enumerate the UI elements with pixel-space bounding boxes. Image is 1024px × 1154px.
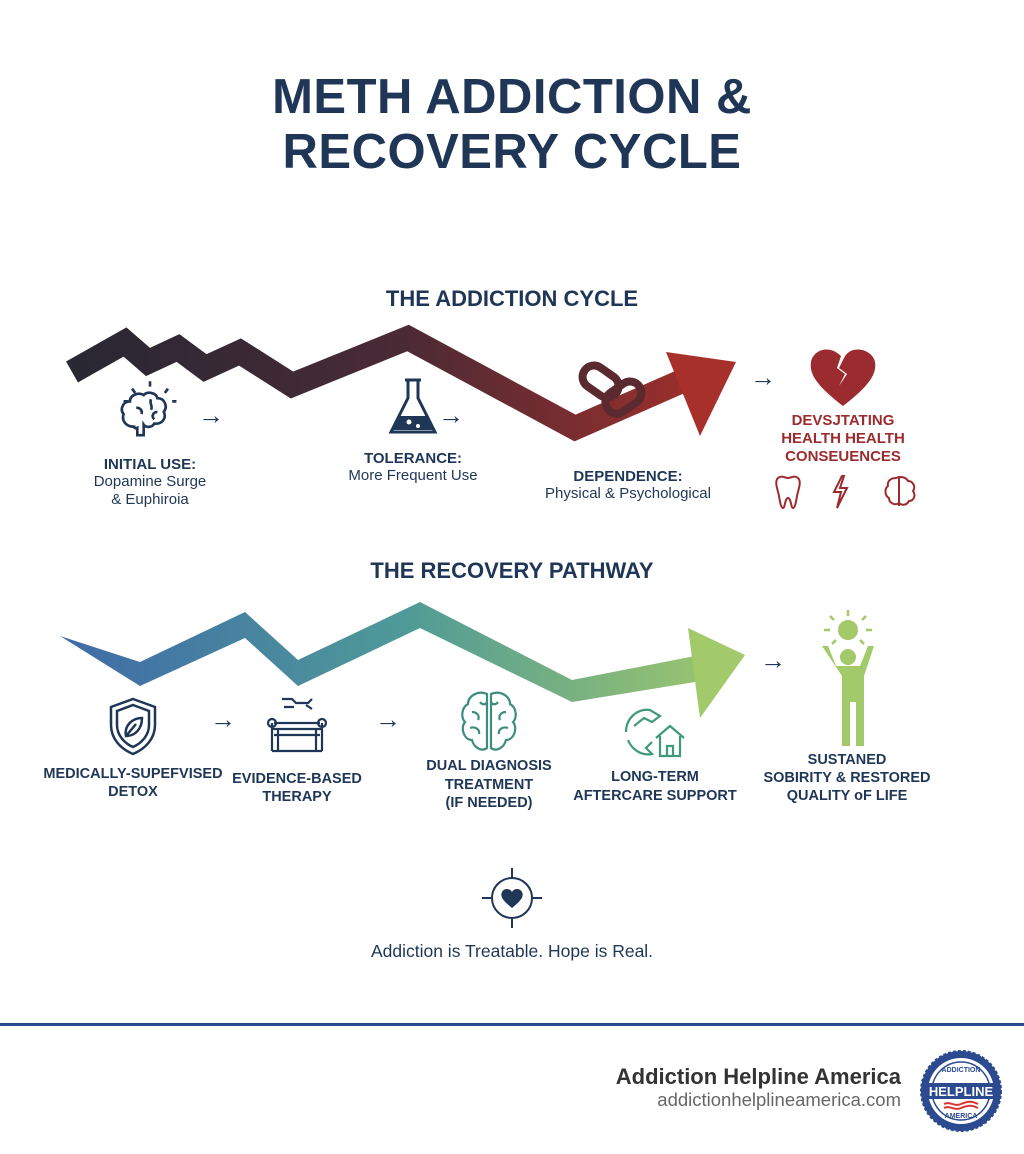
- heading: addiction cycle: THE ADDICTION CYCLE: [386, 286, 638, 311]
- icon: broken heart: [810, 350, 876, 406]
- step: dual diagnosis: (IF NEEDED): [446, 795, 532, 811]
- step: therapy: THERAPY: [262, 789, 332, 805]
- icon: brain teal: [461, 692, 517, 751]
- icon: flask: [388, 378, 438, 434]
- step: dual diagnosis: [426, 692, 552, 811]
- icon: shield: [110, 698, 156, 756]
- icon: chain: [578, 362, 646, 418]
- addiction arrow: [72, 338, 736, 436]
- final outcome: sustained sobriety: SOBIRITY & RESTORED: [763, 770, 931, 786]
- title: [272, 70, 752, 179]
- step: aftercare: AFTERCARE SUPPORT: [573, 788, 737, 804]
- icon: hands and house: [624, 708, 685, 758]
- final outcome: sustained sobriety: SUSTANED: [808, 752, 886, 768]
- icon: crosshair heart: [482, 868, 542, 928]
- step: aftercare: LONG-TERM: [611, 769, 699, 785]
- step: detox: [43, 698, 223, 800]
- arrow: →: [760, 645, 786, 675]
- arrow: →: [438, 400, 464, 430]
- step: initial use: Dopamine Surge: [94, 473, 206, 490]
- footer brand text: addictionhelplineamerica.com: [657, 1089, 901, 1110]
- title: METH ADDICTION &: [272, 70, 752, 124]
- consequences block: DEVSJTATING: [792, 412, 894, 429]
- title: RECOVERY CYCLE: [282, 125, 741, 179]
- step: dual diagnosis: TREATMENT: [445, 776, 533, 792]
- step: detox: MEDICALLY-SUPEFVISED: [43, 766, 223, 782]
- consequences block: [775, 350, 916, 509]
- arrow: →: [375, 704, 401, 734]
- logo badge: [920, 1050, 1002, 1132]
- icon: person with sun: [822, 610, 874, 746]
- icon: brain: [120, 381, 176, 436]
- step: detox: DETOX: [108, 784, 158, 800]
- icon: couch: [266, 698, 328, 752]
- logo badge: AMERICA: [945, 1113, 977, 1120]
- step: therapy: [232, 698, 362, 805]
- step: tolerance: More Frequent Use: [348, 467, 478, 484]
- step: therapy: EVIDENCE-BASED: [232, 771, 362, 787]
- step: aftercare: [573, 708, 737, 804]
- logo badge: ADDICTION: [942, 1067, 980, 1074]
- arrow: →: [210, 704, 236, 734]
- step: dependence: Physical & Psychological: [545, 485, 711, 502]
- step: tolerance: [348, 378, 478, 484]
- step: initial use: [94, 381, 206, 508]
- consequences block: CONSEUENCES: [785, 448, 901, 465]
- footer brand text: Addiction Helpline America: [616, 1064, 901, 1089]
- step: dependence: DEPENDENCE:: [573, 468, 683, 485]
- tagline: Addiction is Treatable. Hope is Real.: [371, 941, 653, 961]
- step: initial use: INITIAL USE:: [104, 456, 196, 473]
- final outcome: sustained sobriety: [763, 610, 931, 804]
- consequences block: HEALTH HEALTH: [781, 430, 905, 447]
- step: dual diagnosis: DUAL DIAGNOSIS: [426, 758, 552, 774]
- recovery arrow: [60, 602, 745, 718]
- icons: tooth bolt brain: [775, 475, 916, 509]
- step: initial use: & Euphiroia: [111, 491, 189, 508]
- heading: recovery pathway: THE RECOVERY PATHWAY: [370, 558, 654, 583]
- footer brand text: [616, 1064, 902, 1110]
- arrow: →: [750, 362, 776, 392]
- step: dependence: [545, 362, 711, 502]
- final outcome: sustained sobriety: QUALITY oF LIFE: [787, 788, 907, 804]
- step: tolerance: TOLERANCE:: [364, 450, 462, 467]
- arrow: →: [198, 400, 224, 430]
- logo badge: HELPLINE: [929, 1084, 993, 1099]
- footer divider: [0, 1023, 1024, 1026]
